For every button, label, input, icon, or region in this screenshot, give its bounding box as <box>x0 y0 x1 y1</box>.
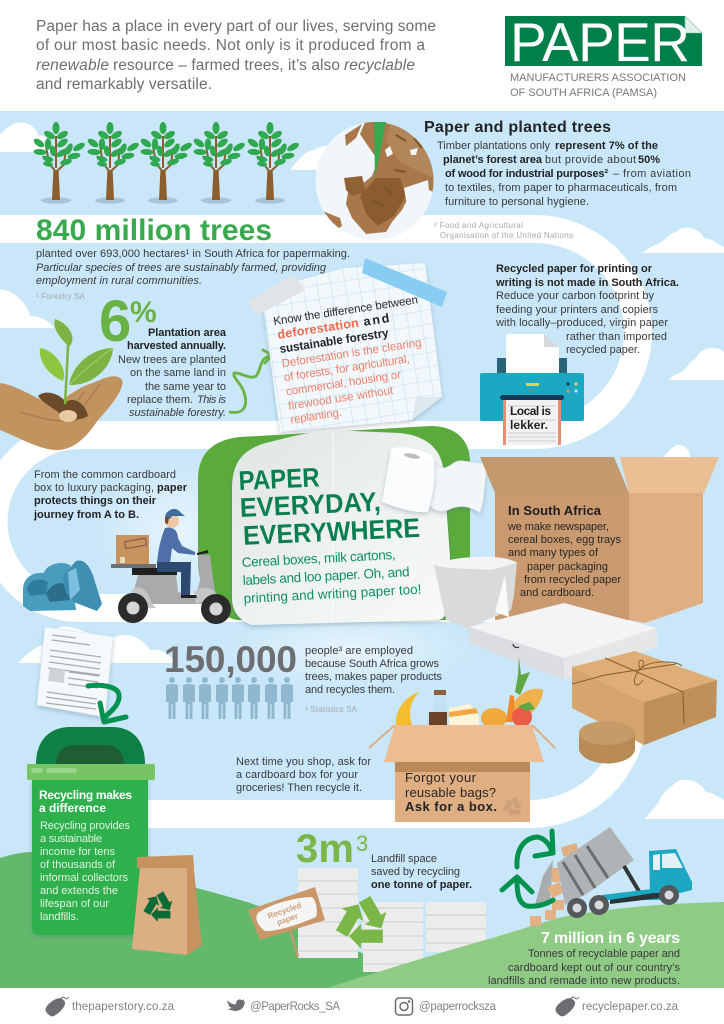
icon: mouse right <box>556 997 579 1016</box>
packaging text: box to luxury packaging, <box>34 482 154 494</box>
card subtitle: Cereal boxes, milk cartons, <box>241 547 396 570</box>
plantation text: New trees are planted <box>118 354 226 366</box>
printed note text: Local is <box>510 404 551 418</box>
icon: recycling truck <box>530 827 692 926</box>
heading: Paper and planted trees: – from aviation <box>613 168 691 180</box>
heading: Paper and planted trees: to textiles, from paper to pharmaceuticals, from <box>445 182 677 194</box>
big stat: 840 million trees: 840 million trees <box>36 214 272 247</box>
footnote 2: Organisation of the United Nations <box>440 231 573 240</box>
packaging text: paper <box>157 482 188 494</box>
heading: Paper and planted trees: represent 7% of the <box>555 140 658 152</box>
bin text: informal collectors <box>40 872 128 884</box>
card title: EVERYDAY, <box>239 487 381 523</box>
card subtitle: labels and loo paper. Oh, and <box>242 564 410 588</box>
trees description: employment in rural communities. <box>36 275 202 287</box>
recycled paper text: writing is not made in South Africa. <box>495 277 679 289</box>
employment text: ³ Statistics SA <box>305 705 358 714</box>
recycling stat text: cardboard kept out of our country’s <box>508 962 680 974</box>
recycling stat text: Tonnes of recyclable paper and <box>528 948 680 960</box>
note text: replanting. <box>290 407 343 427</box>
stat: 6 percent: % <box>130 296 157 329</box>
footer: @paperrocksza <box>419 1001 497 1013</box>
intro text: renewable <box>36 57 109 74</box>
shopping text <box>236 756 371 794</box>
box callout text: Ask for a box. <box>405 799 497 814</box>
shopping text: Next time you shop, ask for <box>236 756 371 768</box>
printed note text <box>510 404 551 432</box>
intro text: and remarkably versatile. <box>36 76 212 93</box>
panel: notepaper on deforestation <box>247 258 447 434</box>
icon: pizza box <box>469 603 657 680</box>
employment text: and recycles them. <box>305 684 395 696</box>
note text: and <box>362 311 390 329</box>
icon: printer <box>480 334 584 445</box>
note text <box>273 294 434 427</box>
arrow: squiggle to note <box>230 350 272 412</box>
icon: kraft parcel <box>572 651 717 745</box>
plantation text: on the same land in <box>130 367 226 379</box>
icon: mouse left <box>46 997 69 1016</box>
recycling stat text: 7 million in 6 years <box>541 930 680 947</box>
PAMSA logo <box>505 11 702 99</box>
bin text: and extends the <box>40 885 118 897</box>
printed note text: lekker. <box>510 418 548 432</box>
packaging text <box>33 469 188 521</box>
sign: recycled paper <box>248 887 325 957</box>
white winding road <box>0 229 638 814</box>
panel: paper everyday card <box>232 430 450 625</box>
intro text: Paper has a place in every part of our lives, serving some <box>36 18 436 35</box>
bin text: lifespan of our <box>40 898 109 910</box>
employment text: trees, makes paper products <box>305 671 442 683</box>
box text: from recycled paper <box>524 574 621 586</box>
bin text <box>39 788 132 923</box>
landfill text: saved by recycling <box>371 866 460 878</box>
sign: recycled paper: paper <box>276 911 299 927</box>
icon: toilet roll <box>382 444 487 513</box>
landfill text <box>371 853 472 891</box>
box text <box>507 503 622 599</box>
recycling stat text: landfills and remade into new products. <box>488 975 680 987</box>
box callout text: Forgot your <box>405 770 477 785</box>
note text: Deforestation is the clearing <box>281 337 422 370</box>
hill: dark green <box>0 852 440 988</box>
plantation text: Plantation area <box>148 327 227 339</box>
note text: of forests, for agricultural, <box>283 353 411 384</box>
plantation text: sustainable forestry. <box>129 407 226 419</box>
PAMSA logo: OF SOUTH AFRICA (PAMSA) <box>510 87 657 99</box>
box text: cereal boxes, egg trays <box>508 534 622 546</box>
icon: recycling symbol <box>328 896 389 957</box>
heading: Paper and planted trees: Timber plantations only <box>437 140 550 152</box>
plantation text: This is <box>197 394 226 406</box>
big 3m3 stat: 3 <box>356 831 368 856</box>
recycled paper text: feeding your printers and copiers <box>496 304 658 316</box>
soft glow behind scooter and panel <box>90 460 480 690</box>
icon: instagram <box>396 998 412 1015</box>
big 3m3 stat: 3m <box>296 827 354 871</box>
employment text: people³ are employed <box>305 645 413 657</box>
landfill text: one tonne of paper. <box>371 879 472 891</box>
heading: Paper and planted trees: of wood for industrial purposes² <box>445 168 608 180</box>
icon: round box <box>579 721 635 764</box>
icon: document <box>37 627 113 717</box>
trees description: Particular species of trees are sustainably farmed, providing <box>36 262 327 274</box>
bin text: income for tens <box>40 846 116 858</box>
icon: big cardboard box <box>480 457 719 623</box>
stat: 150,000 <box>164 639 297 719</box>
panel: recycling bin <box>27 727 155 935</box>
box text: we make newspaper, <box>507 521 609 533</box>
box callout text: reusable bags? <box>405 785 496 800</box>
intro text: of our most basic needs. Not only is it produced from a <box>36 37 425 54</box>
box text: In South Africa <box>508 503 602 518</box>
packaging text: From the common cardboard <box>34 469 176 481</box>
footer: @PaperRocks_SA <box>250 1001 340 1013</box>
note text: deforestation <box>276 316 360 342</box>
recycled paper text: Reduce your carbon footprint by <box>496 290 654 302</box>
shopping text: a cardboard box for your <box>236 769 358 781</box>
intro text: resource – farmed trees, it’s also <box>113 57 340 74</box>
trees description: ¹ Forestry SA <box>36 292 86 301</box>
parcel <box>116 535 149 564</box>
icon: twitter bird <box>227 999 245 1011</box>
heading: Paper and planted trees: Paper and planted trees <box>424 119 611 136</box>
recycling stat text <box>488 930 680 987</box>
box text: and cardboard. <box>520 587 594 599</box>
shopping text: groceries! Then recycle it. <box>236 782 362 794</box>
trees description <box>36 248 350 301</box>
bin text: Recycling makes <box>39 788 132 802</box>
clouds <box>0 122 724 819</box>
recycled paper text: rather than imported <box>566 331 667 343</box>
panel: green folder background <box>198 426 476 620</box>
icon: heart gift box <box>23 561 102 611</box>
card subtitle: printing and writing paper too! <box>243 582 422 606</box>
footnote 2: ² Food and Agricultural <box>434 221 523 230</box>
plantation text: harvested annually. <box>127 340 226 352</box>
arrows: recycling loop <box>502 831 553 906</box>
footer: thepaperstory.co.za <box>72 1001 175 1013</box>
employment text: because South Africa grows <box>305 658 440 670</box>
packaging text: journey from A to B. <box>33 509 139 521</box>
note text: sustainable forestry <box>279 326 390 356</box>
PAMSA logo: PAPER <box>510 11 690 73</box>
heading: Paper and planted trees: furniture to personal hygiene. <box>445 196 589 208</box>
bin text: Recycling provides <box>40 820 130 832</box>
intro text: recyclable <box>344 57 415 74</box>
footnote 2 <box>434 221 573 240</box>
card title <box>238 458 421 551</box>
sign: recycled paper: Recycled <box>266 901 303 921</box>
plantation text: replace them. <box>127 394 193 406</box>
panel: grocery cardboard box <box>369 725 555 822</box>
footer <box>0 988 724 1024</box>
bin text: a difference <box>39 801 106 815</box>
note text: firewood use without <box>287 385 395 413</box>
heading: Paper and planted trees: 50% <box>638 154 660 166</box>
heading: Paper and planted trees: but provide about <box>545 154 636 166</box>
bin text: landfills. <box>40 911 79 923</box>
paper stacks <box>298 868 486 972</box>
recycled paper text: recycled paper. <box>566 344 640 356</box>
landfill text: Landfill space <box>371 853 437 865</box>
card title: PAPER <box>238 462 320 496</box>
card subtitle <box>241 546 422 606</box>
icon: takeaway box <box>434 557 517 628</box>
plantation text: the same year to <box>145 381 226 393</box>
note text: Know the difference between <box>273 294 419 328</box>
packaging text: protects things on their <box>34 495 157 507</box>
bin text: a sustainable <box>40 833 102 845</box>
plantation text <box>118 327 227 419</box>
heading: Paper and planted trees <box>424 119 691 208</box>
icon: scooter courier <box>111 509 231 624</box>
footer: recyclepaper.co.za <box>582 1001 679 1013</box>
employment text <box>305 645 442 714</box>
recycled paper text <box>495 263 679 356</box>
rider <box>157 509 197 598</box>
trees row <box>32 122 300 204</box>
recycled paper text: with locally–produced, virgin paper <box>495 317 668 329</box>
recycled paper text: Recycled paper for printing or <box>496 263 653 275</box>
people row <box>166 677 293 719</box>
note text: commercial, housing or <box>285 369 402 398</box>
icon: hand holding seedling <box>0 319 122 450</box>
arrow: paper to bin <box>88 685 126 722</box>
stat: 150,000: 150,000 <box>164 639 297 680</box>
globe <box>316 118 440 240</box>
stat: 6 percent <box>99 289 157 354</box>
PAMSA logo: MANUFACTURERS ASSOCIATION <box>510 72 686 84</box>
intro text <box>36 18 436 93</box>
box text: and many types of <box>508 547 599 559</box>
icon: groceries <box>396 657 543 728</box>
icon: paper bag <box>132 855 202 955</box>
heading: Paper and planted trees: planet’s forest area <box>443 154 543 166</box>
card title: EVERYWHERE <box>242 513 421 551</box>
box callout text <box>405 770 497 814</box>
trees description: planted over 693,000 hectares¹ in South Africa for papermaking. <box>36 248 350 260</box>
hill: light green <box>328 902 724 988</box>
stat: 6 percent: 6 <box>99 289 131 354</box>
bin text: of thousands of <box>40 859 116 871</box>
box text: paper packaging <box>527 561 608 573</box>
